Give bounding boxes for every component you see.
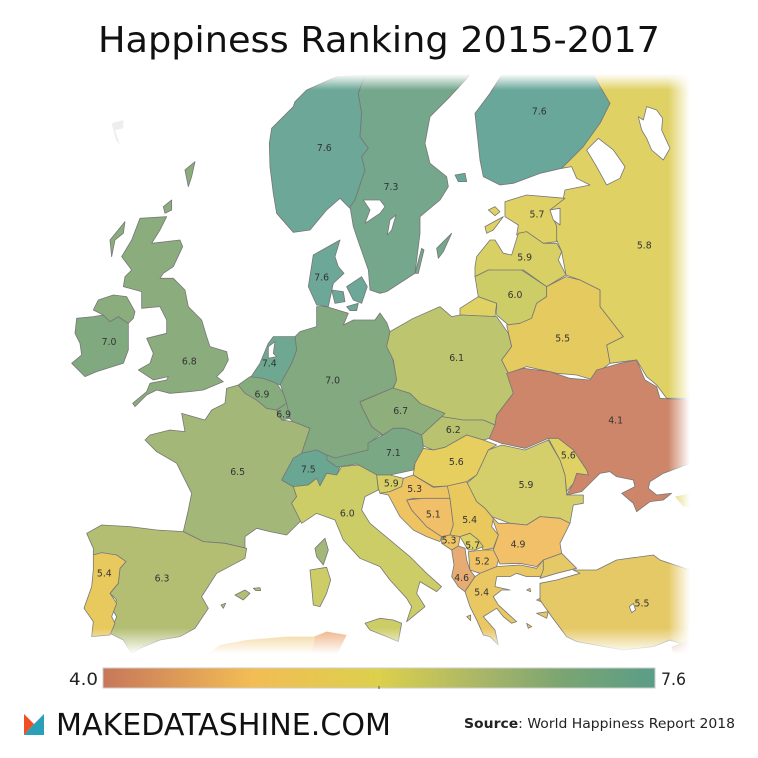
logo icon [24, 714, 44, 735]
country: Croatia [380, 475, 452, 542]
country: Albania: 4.6 [454, 573, 469, 584]
country: Kaliningrad [460, 297, 497, 317]
country: Poland [387, 307, 513, 425]
legend minimum: 4.0 [69, 670, 98, 690]
country: Ukraine [488, 360, 690, 512]
country: Bosnia and Herzegovina [407, 498, 453, 537]
country: Switzerland: 7.5 [301, 465, 316, 476]
country: Hungary: 5.6 [449, 457, 464, 468]
logo wordmark: MAKEDATASHINE.COM [56, 708, 391, 743]
country: Kosovo: 5.7 [465, 540, 480, 551]
country: Czech Republic: 6.7 [393, 406, 408, 417]
country: Estonia [485, 195, 565, 243]
country: Turkey: 5.5 [635, 599, 649, 610]
country: Portugal [84, 553, 126, 637]
country: Spain: 6.3 [155, 574, 169, 585]
country: Belarus: 5.5 [555, 334, 570, 345]
region: Faroe Islands [112, 120, 123, 145]
country: Russia [550, 75, 700, 398]
country: Netherlands [250, 337, 297, 385]
country: Netherlands: 7.4 [262, 359, 277, 370]
country: Luxembourg [276, 403, 291, 420]
country: Russia: 5.8 [637, 240, 652, 251]
country: Belarus [502, 277, 623, 380]
country: Norway [269, 75, 368, 232]
region: Caucasus edge [675, 493, 690, 507]
country: United Kingdom [93, 162, 228, 407]
legend maximum: 7.6 [661, 670, 686, 690]
country: Montenegro [442, 535, 460, 550]
country: Romania: 5.9 [519, 480, 533, 491]
region: North Africa [207, 632, 347, 655]
country: Ireland: 7.0 [102, 337, 116, 348]
country: Sweden [350, 75, 470, 293]
country: Moldova [548, 438, 588, 492]
country: Turkey [540, 553, 690, 650]
country: Croatia: 5.3 [407, 484, 422, 495]
country: Serbia: 5.4 [462, 515, 477, 526]
country: Latvia: 5.9 [517, 252, 532, 263]
country: Slovenia [377, 475, 403, 493]
country: Germany: 7.0 [325, 375, 340, 386]
country: Finland: 7.6 [532, 107, 547, 118]
country: Serbia [447, 482, 498, 550]
country: Czech Republic [360, 388, 445, 435]
region: Syria edge [672, 640, 690, 655]
country: Bulgaria: 4.9 [511, 540, 525, 551]
country: Slovenia: 5.9 [384, 478, 399, 489]
country: Estonia: 5.7 [530, 209, 544, 220]
title: Happiness Ranking 2015-2017 [98, 20, 660, 61]
country: Portugal: 5.4 [97, 569, 112, 580]
country: Romania [467, 440, 583, 525]
country: Latvia [475, 232, 566, 287]
country: Germany [280, 307, 397, 458]
country: Hungary [413, 435, 497, 487]
source note: Source: World Happiness Report 2018 [464, 716, 735, 732]
country: Moldova: 5.6 [561, 451, 576, 462]
country: Sweden: 7.3 [384, 182, 398, 193]
country: Belgium [238, 377, 287, 410]
country: France [145, 385, 328, 565]
country: Austria: 7.1 [386, 448, 401, 459]
country: Macedonia [468, 550, 498, 573]
country: Greece [465, 560, 548, 645]
country: Italy: 6.0 [340, 508, 355, 519]
country: Poland: 6.1 [449, 353, 464, 364]
country: Slovakia: 6.2 [446, 425, 461, 436]
country: Belgium: 6.9 [255, 389, 269, 400]
country: Bosnia and Herzegovina: 5.1 [426, 510, 441, 521]
country: France: 6.5 [230, 467, 245, 478]
country: United Kingdom: 6.8 [182, 356, 197, 367]
country: Montenegro: 5.3 [442, 536, 456, 547]
country: Switzerland [282, 450, 340, 487]
country: Greece: 5.4 [474, 587, 489, 598]
country: Ireland [72, 315, 128, 377]
country: Albania [452, 546, 475, 592]
country: Lithuania [475, 270, 547, 325]
country: Lithuania: 6.0 [508, 290, 522, 301]
colour scale legend [69, 668, 686, 690]
country: Luxembourg: 6.9 [276, 409, 291, 420]
country: Bulgaria [492, 517, 570, 567]
country: Norway: 7.6 [317, 143, 332, 154]
country: Ukraine: 4.1 [608, 416, 623, 427]
country: Macedonia: 5.2 [475, 556, 490, 567]
country: Finland [455, 75, 610, 185]
country: Denmark [308, 240, 367, 311]
region: Tunisia [312, 632, 347, 655]
country: Austria [327, 428, 423, 475]
country: Slovakia [422, 417, 495, 450]
country: Kosovo [460, 533, 483, 551]
country: Denmark: 7.6 [314, 273, 329, 284]
country: Spain [87, 525, 261, 653]
country: Italy [292, 465, 442, 642]
